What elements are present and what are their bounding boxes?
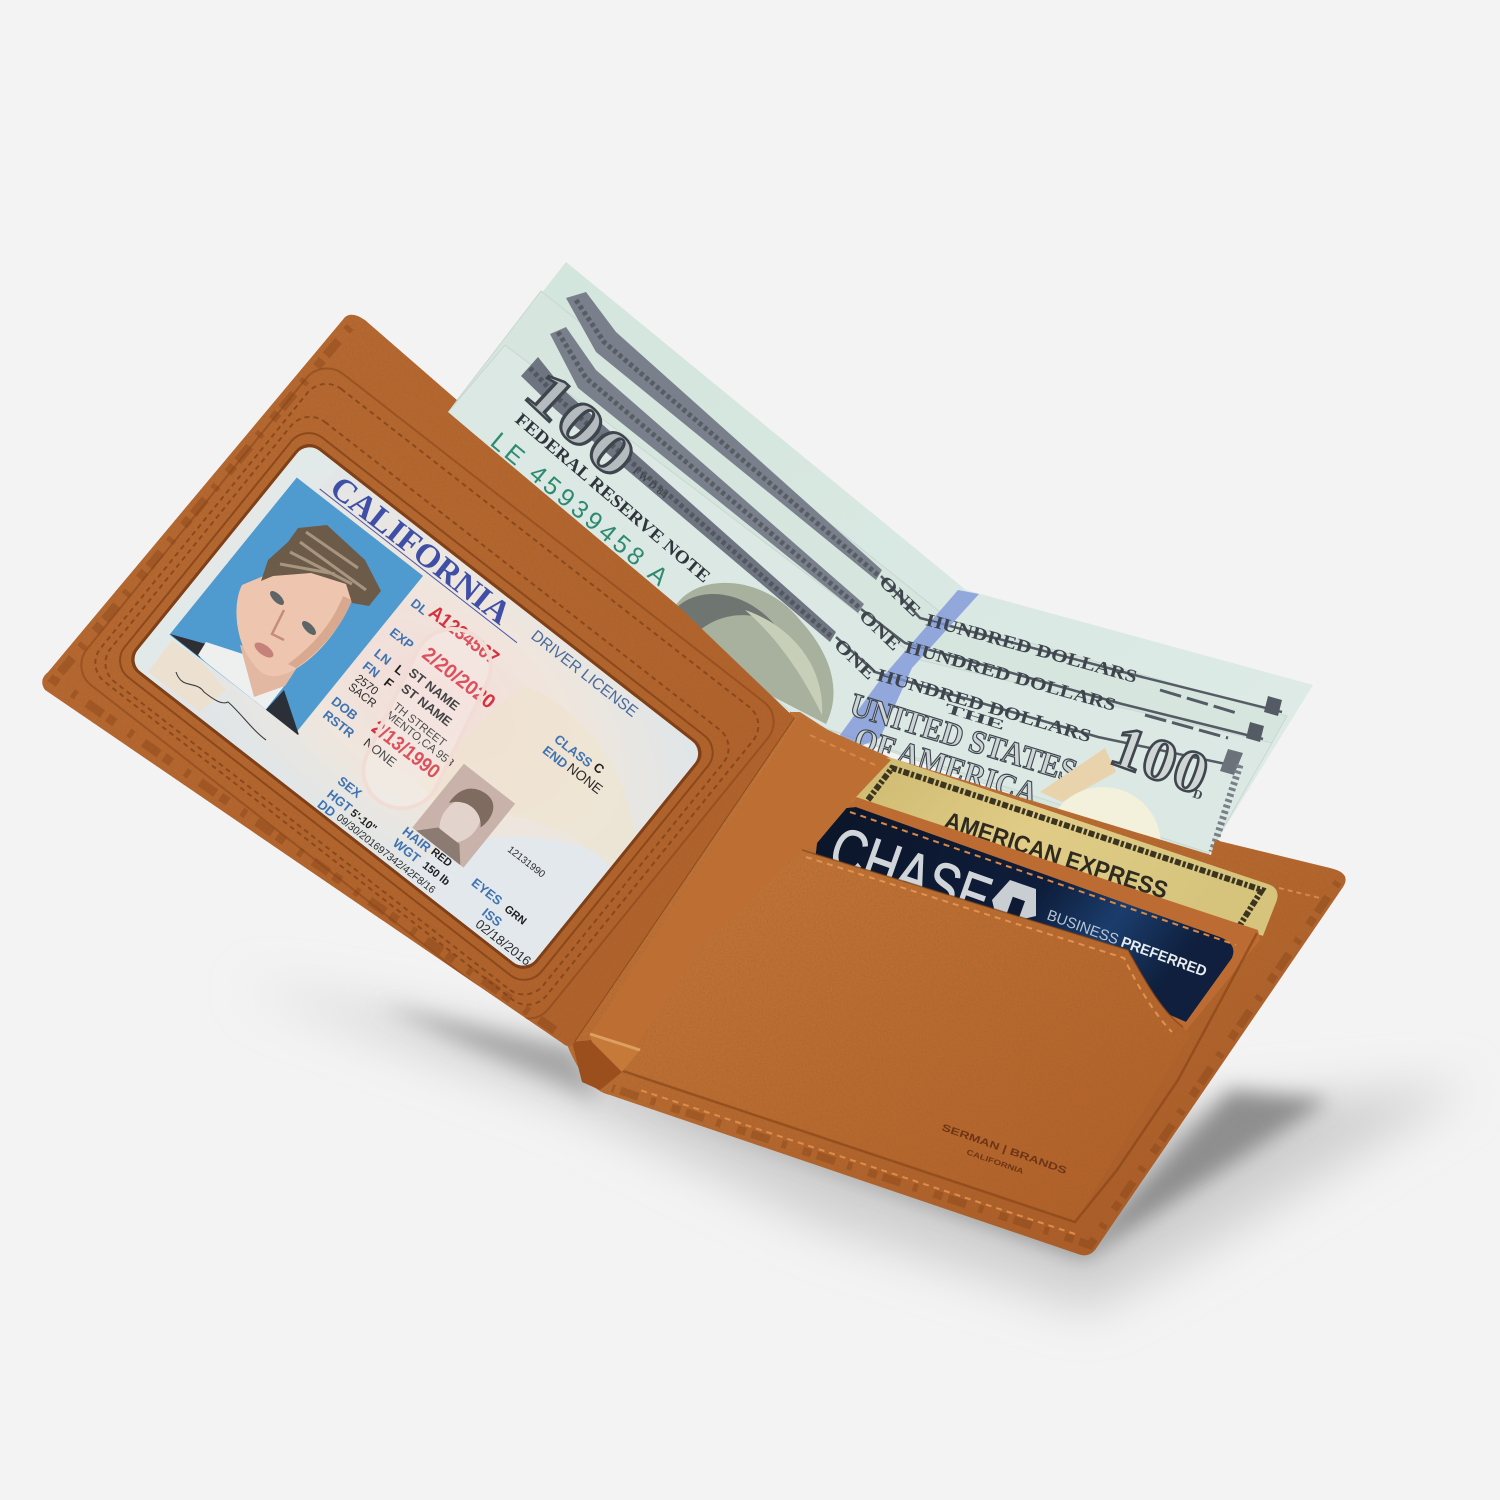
license background: [128, 441, 705, 972]
blue chase business preferred card: [815, 807, 1234, 1022]
one hundred dollars line 1: HUNDRED DOLLARS: [924, 610, 1139, 687]
bill numeral 100 top left: 100: [513, 357, 649, 491]
regular values: 09/30/201697342/42F8/16: [334, 812, 438, 896]
state underline: [320, 489, 517, 643]
regular values: [276, 624, 647, 969]
right panel edge line: [575, 718, 795, 1042]
one hundred dollars line 2: [855, 605, 1118, 715]
serial number: LE 45939458 A: [485, 427, 673, 591]
red values: A1234567: [424, 602, 503, 669]
slot stitching: [850, 812, 1236, 945]
bill numeral 100 right: 100: [1103, 712, 1217, 808]
seal letter: FW D 84: [630, 465, 670, 502]
rear bill: [448, 262, 1313, 860]
black values: 150 lb: [420, 860, 452, 888]
engraved bands: [521, 292, 1282, 852]
terrain tint: [432, 685, 635, 868]
signature strip: [148, 640, 266, 740]
blue field labels: END: [540, 743, 571, 771]
american express wordmark: AMERICAN EXPRESS: [941, 807, 1171, 905]
pocket edge shadow: [802, 850, 1183, 1027]
brand stamp: CALIFORNIA: [965, 1147, 1026, 1176]
spine fold: [572, 1034, 640, 1090]
black values: ST NAME: [398, 681, 455, 729]
blue field labels: CLASS: [551, 732, 596, 770]
mouth: [252, 640, 276, 660]
red values: 2/20/2020: [418, 643, 499, 713]
hologram oval: [351, 616, 504, 821]
jacket: [170, 634, 205, 658]
the united states of america: UNITED STATES: [846, 687, 1081, 790]
neck: [240, 645, 302, 697]
lower stitching: [640, 1090, 1075, 1234]
black values: L: [392, 662, 407, 678]
ground shadow: [240, 985, 1470, 1310]
front bill: [448, 345, 1272, 853]
panel: right wallet half: [560, 700, 1360, 1270]
one hundred dollars line 1: ONE: [875, 571, 925, 621]
embossed edge texture: [54, 327, 560, 1034]
wallet illustration: [42, 262, 1443, 1320]
frame ridges and stitching: [71, 358, 784, 1029]
preferred label: PREFERRED: [1119, 934, 1209, 981]
blue field labels: HGT: [324, 787, 355, 815]
portrait of license holder: [170, 525, 381, 738]
blue field labels: [272, 596, 631, 942]
hair: [261, 525, 381, 606]
blue field labels: FN: [360, 658, 383, 681]
red values: 2/13/1990: [367, 717, 444, 783]
chase octagon logo: [992, 880, 1036, 918]
brand stamp: SERMAN | BRANDS: [940, 1122, 1069, 1177]
pocket stitching: [806, 857, 1172, 1032]
light top left area: [128, 441, 339, 687]
back leather: [565, 712, 1346, 1255]
the united states of america: THE: [943, 701, 1007, 734]
one hundred dollars line 2: HUNDRED DOLLARS: [903, 637, 1118, 715]
panel: left wallet half: [40, 310, 800, 1055]
license text and fields: [159, 465, 703, 971]
embossed edge: [612, 882, 1338, 1245]
middle bill: [448, 291, 1287, 860]
left panel grain: [40, 310, 800, 1055]
chase wordmark: CHASE: [821, 814, 1000, 934]
one hundred dollars line 2: ONE: [855, 605, 905, 655]
banknotes: three 100 dollar bills: [448, 262, 1313, 903]
black values: F: [381, 675, 397, 691]
blue field labels: DL: [408, 596, 431, 618]
regular values: NONE: [564, 760, 606, 797]
black values: 5'-10": [348, 807, 379, 835]
shaded cheek: [288, 596, 352, 668]
one hundred dollars line 3: HUNDRED DOLLARS: [875, 665, 1094, 746]
eyes: [270, 591, 284, 605]
ghost portrait: [412, 764, 515, 868]
blue field labels: DOB: [329, 694, 361, 723]
front pocket: [590, 715, 1338, 1245]
regular values: 2570: [352, 673, 380, 698]
lining stitching: [810, 735, 875, 765]
black values: RED: [428, 846, 454, 870]
gold american express card: [850, 758, 1278, 936]
blue security strip: [840, 590, 979, 748]
blue field labels: DD: [314, 797, 339, 820]
blue field labels: WGT: [390, 835, 423, 866]
portrait background: [170, 477, 423, 733]
middle card slot: [815, 797, 1260, 1032]
shirt: [198, 642, 285, 713]
brand stamp: [940, 1122, 1069, 1177]
state name: CALIFORNIA: [323, 470, 518, 632]
blue field labels: EXP: [387, 625, 417, 653]
federal district letter: D: [1191, 786, 1205, 803]
blue field labels: RSTR: [320, 707, 358, 741]
california driver license window: [124, 437, 709, 976]
black values: [304, 627, 635, 942]
black values: C: [591, 759, 608, 777]
license type: DRIVER LICENSE: [527, 628, 641, 721]
pocket grain: [615, 845, 1195, 1230]
inner lining: [590, 715, 891, 1065]
cream ribbon and watermark: [1040, 748, 1161, 903]
one hundred dollars line 3: ONE: [830, 634, 880, 684]
regular values: TH STREET: [390, 701, 448, 749]
regular values: 12131990: [505, 844, 547, 881]
face: [236, 568, 352, 676]
one hundred dollars line 3: [830, 634, 1094, 746]
regular values: 02/18/2016: [473, 916, 534, 969]
black values: GRN: [502, 903, 529, 928]
federal reserve note: FEDERAL RESERVE NOTE: [511, 409, 714, 586]
outer embossed leather: [42, 315, 795, 1046]
side seam: [620, 933, 1257, 1222]
blue field labels: SEX: [335, 773, 365, 801]
red values: [345, 602, 523, 783]
regular values: MENTO,CA 958: [383, 709, 456, 769]
black values: ST NAME: [406, 665, 463, 714]
the united states of america: OF AMERICA: [850, 721, 1042, 813]
regular values: SACR: [346, 681, 378, 710]
one hundred dollars line 1: [875, 571, 1139, 687]
nose: [272, 610, 284, 640]
back leather stitching: [1279, 888, 1320, 898]
blue field labels: EYES: [469, 875, 506, 908]
portrait hair: [672, 583, 834, 724]
ornate border: [868, 768, 1262, 925]
blue field labels: ISS: [479, 905, 505, 930]
blue field labels: HAIR: [399, 824, 434, 855]
business preferred label: BUSINESS: [1045, 907, 1121, 948]
regular values: NONE: [361, 735, 400, 770]
blue field labels: LN: [371, 646, 394, 668]
back leather grain: [560, 700, 1360, 1270]
guilloche lower right: [400, 836, 616, 966]
window frame inset: [124, 437, 709, 976]
